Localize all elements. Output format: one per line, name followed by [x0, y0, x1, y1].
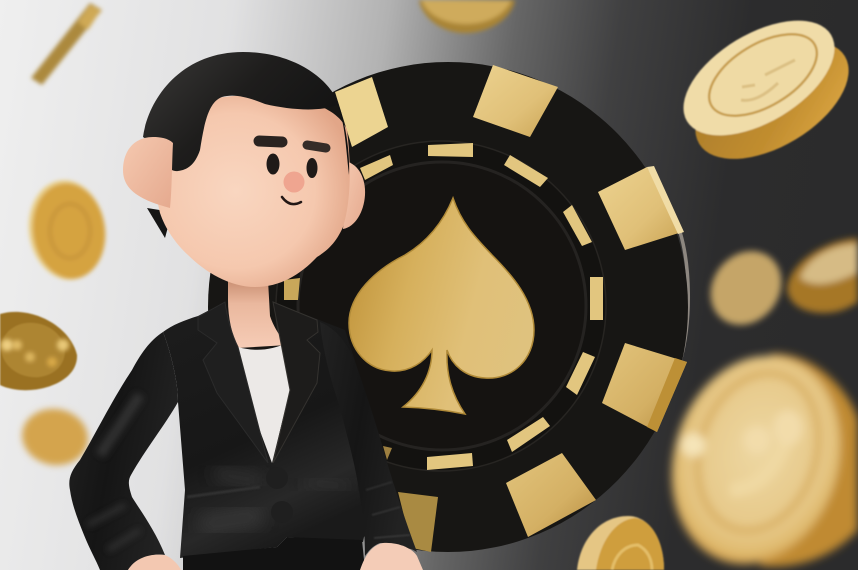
coin: bottom centre: [577, 516, 664, 570]
coin: left lower blurred: [18, 404, 92, 470]
coin: far right blurred: [787, 238, 858, 313]
right ear: [343, 162, 365, 229]
poker chip: [208, 62, 688, 552]
right eyebrow: [307, 145, 326, 148]
right eye: [306, 158, 318, 178]
chip inner gold dashes: [284, 143, 603, 470]
jacket body: [163, 302, 382, 558]
coin: top centre blurred: [419, 0, 515, 33]
jacket pocket flap and gloss: [187, 472, 350, 525]
left arm gloss: [88, 395, 140, 550]
chip rim highlight: [680, 232, 688, 362]
jacket buttons: [266, 467, 293, 523]
white shirt: [238, 343, 290, 463]
left ear: [123, 137, 173, 208]
back hair below ear: [147, 208, 172, 238]
coin: top left blurred: [31, 3, 102, 85]
coin: left middle: [0, 312, 77, 390]
right arm: [320, 322, 417, 556]
head: [153, 95, 350, 287]
left lapel: [198, 302, 268, 463]
right hand: [360, 543, 423, 570]
chip gold spade: [349, 198, 534, 414]
mouth: [282, 197, 301, 204]
left eyebrow: [259, 141, 282, 142]
chip outer gold blocks: [335, 65, 687, 552]
coin: top right: [664, 0, 858, 183]
coin: left upper: [22, 175, 112, 285]
neck: [228, 280, 288, 348]
left hand: [128, 555, 181, 570]
left arm: [69, 332, 178, 570]
right arm gloss: [366, 482, 410, 538]
coin: right middle blurred: [696, 237, 796, 339]
trousers: [183, 537, 365, 570]
left eye: [266, 154, 280, 174]
chip face: [208, 62, 688, 552]
right lapel: [273, 302, 320, 463]
character: [69, 52, 423, 570]
chip inner ring band: [276, 141, 606, 471]
chip inner disc: [298, 162, 586, 450]
coin: bottom right large: [647, 335, 858, 570]
hair: [143, 52, 349, 175]
nose: [284, 172, 304, 192]
